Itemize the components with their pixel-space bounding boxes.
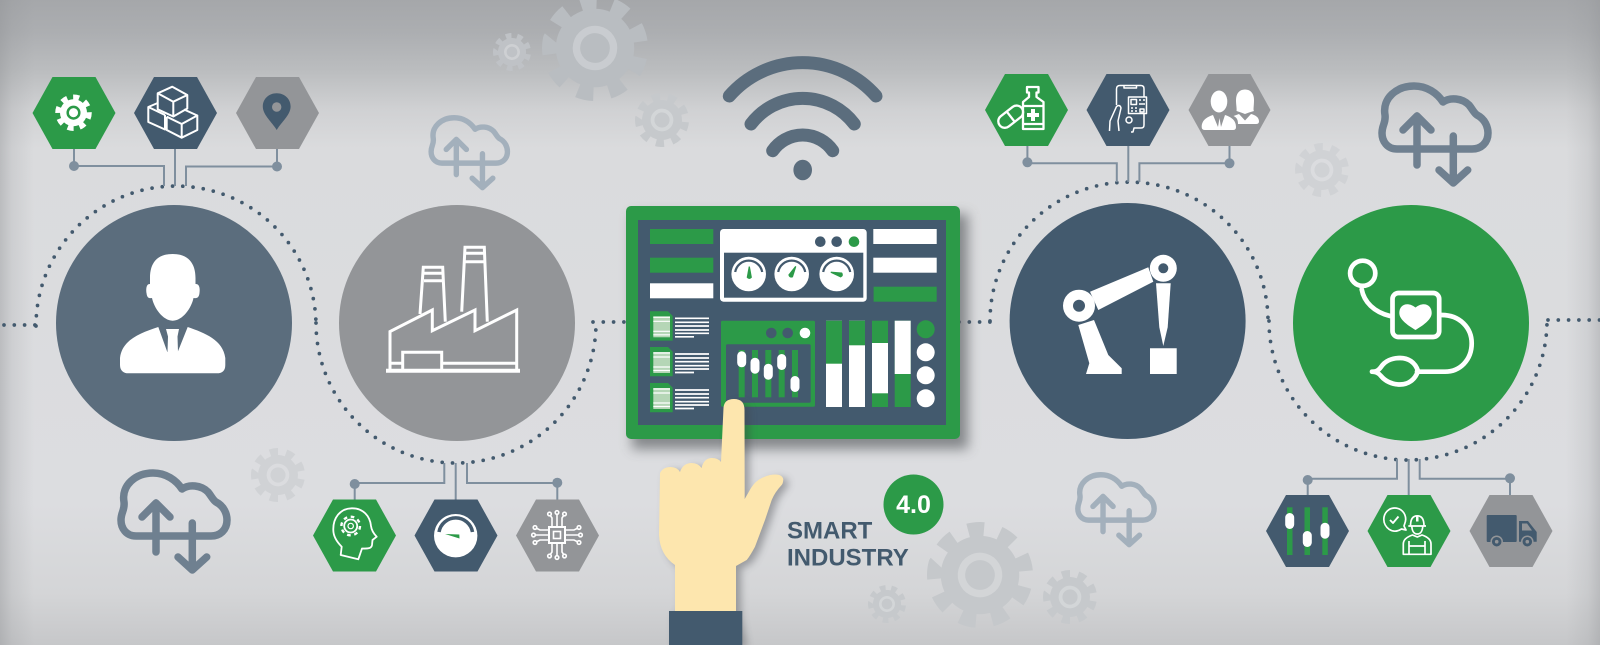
circle: factory (339, 205, 575, 441)
group: person with hexagons (32, 77, 319, 441)
cloud: lower left (121, 473, 227, 570)
hand shadow (664, 402, 788, 645)
hexagon: gauge (414, 500, 498, 572)
hexagon: truck (1470, 495, 1552, 567)
icon: businessman (120, 254, 225, 373)
mixer window (721, 321, 815, 407)
hexagon: circuit chip (516, 500, 599, 572)
connectors bottom right (1303, 459, 1515, 495)
group: factory with hexagons (313, 205, 599, 572)
label: smart industry (787, 518, 909, 572)
hand (659, 399, 783, 612)
right status bars (873, 229, 937, 302)
tablet screen (638, 220, 946, 425)
hexagon: gear (32, 77, 116, 149)
panel: dashboard tablet (626, 206, 968, 449)
icon: robot arm (1063, 255, 1177, 374)
hexagon: sliders (1266, 495, 1349, 567)
group: robot with hexagons (985, 74, 1270, 439)
label: smart industry: SMART (787, 518, 873, 544)
icon: factory (386, 247, 520, 371)
icon: heart monitor stethoscope (1350, 261, 1472, 384)
hexagon: worker (1368, 495, 1450, 567)
circle: health (1293, 205, 1529, 441)
hexagon: phone with QR (1086, 74, 1170, 146)
icon: pointing hand (659, 399, 788, 645)
hexagon: boxes (134, 77, 217, 149)
hexagon: medicine (985, 74, 1068, 146)
badge: 4.0 (884, 474, 944, 534)
bar chart (826, 321, 911, 407)
hexagon: head with gear (313, 500, 396, 572)
cuff (669, 611, 742, 645)
tablet frame (626, 206, 960, 439)
cloud: small lower centre (1078, 475, 1154, 545)
background gears (252, 0, 1349, 630)
left status bars (650, 229, 713, 298)
gauges window (720, 229, 867, 302)
document list (650, 311, 709, 412)
connectors bottom left (350, 463, 562, 500)
cloud: upper right (1382, 86, 1488, 183)
label: smart industry: INDUSTRY (787, 545, 909, 572)
hexagon: location pin (236, 77, 319, 149)
connectors top right (1022, 146, 1234, 182)
dotted connection path (4, 182, 1600, 463)
group: health with hexagons (1266, 205, 1552, 567)
indicator dots (917, 320, 935, 407)
circle: person (56, 205, 292, 441)
panel shadow (632, 214, 968, 449)
icon: wifi (729, 63, 876, 180)
cloud: small upper left (431, 118, 507, 188)
hexagon: two people (1188, 74, 1270, 146)
badge: 4.0: 4.0 (896, 491, 931, 519)
circle: robot (1010, 203, 1246, 439)
connectors top left (69, 149, 282, 186)
